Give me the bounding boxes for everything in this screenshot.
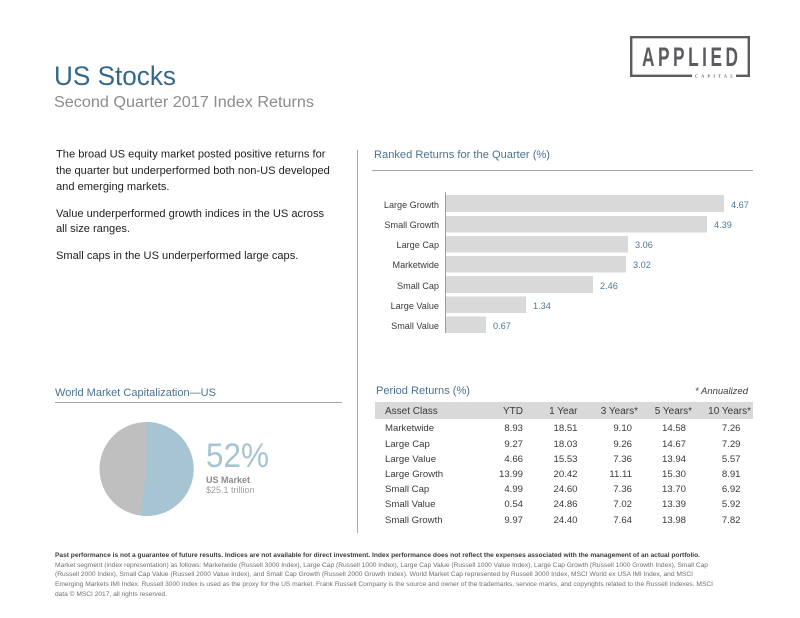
table: 20.42 <box>553 469 578 480</box>
table: 13.70 <box>662 484 686 495</box>
table: 9.97 <box>504 515 523 526</box>
table: 15.53 <box>553 454 578 465</box>
table: 18.51 <box>553 423 578 434</box>
table: 7.02 <box>613 499 632 510</box>
stat label <box>206 475 255 495</box>
table: 7.64 <box>613 515 633 526</box>
table: Marketwide <box>385 423 434 434</box>
table: Large Cap <box>385 439 430 450</box>
heading: world market cap: World Market Capitalization—US <box>55 387 216 399</box>
bar chart: 1.34 <box>533 301 551 311</box>
footnote: Past performance is not a guarantee of future results. Indices are not available for direct investment. Index performance does not reflect the expenses associated with the management of an actual portfolio. <box>55 552 700 559</box>
table: 5.57 <box>722 454 740 465</box>
footnote: Market segment (index representation) as follows: Marketwide (Russell 3000 Index), Large Cap (Russell 1000 Index), Large Cap Value (Russell 1000 Value Index), Large Cap Growth (Russell 1000 Growth Index), Small Cap <box>55 562 709 569</box>
bar chart: 0.67 <box>493 321 511 331</box>
panel: ranked returns <box>372 149 753 333</box>
table: 5.92 <box>722 499 740 510</box>
pie chart <box>100 422 194 516</box>
table: Small Growth <box>385 515 443 526</box>
note: annualized: * Annualized <box>695 386 749 397</box>
table: 24.40 <box>553 515 578 526</box>
table: 9.27 <box>504 439 523 450</box>
bar chart: Marketwide <box>392 260 439 270</box>
text block: market summary: and emerging markets. <box>56 181 169 193</box>
text block: market summary: Value underperformed growth indices in the US across <box>56 208 324 220</box>
table: 7.36 <box>613 484 632 495</box>
bar chart: Large Growth <box>384 200 439 210</box>
table: 14.58 <box>662 423 686 434</box>
table: 7.29 <box>722 439 740 450</box>
bar chart: 4.67 <box>731 200 749 210</box>
text block: market summary: Small caps in the US underperformed large caps. <box>56 250 298 262</box>
stat: 52%: 52% <box>206 437 269 475</box>
table: 9.26 <box>613 439 632 450</box>
text block: market summary: all size ranges. <box>56 223 130 235</box>
bar chart: 3.02 <box>633 260 651 270</box>
table: 7.82 <box>722 515 740 526</box>
bar chart: 4.39 <box>714 220 732 230</box>
table: 9.10 <box>613 423 632 434</box>
table: 8.93 <box>504 423 523 434</box>
table: Small Value <box>385 499 435 510</box>
table: 6.92 <box>722 484 740 495</box>
table: 4.99 <box>504 484 523 495</box>
table: 14.67 <box>662 439 686 450</box>
text block: market summary: The broad US equity market posted positive returns for <box>56 148 326 160</box>
table: 1 Year <box>549 406 578 417</box>
logo: Applied Capital: APPLIED <box>642 41 738 72</box>
table: 8.91 <box>722 469 740 480</box>
bar chart <box>384 192 749 333</box>
bar chart: Small Value <box>391 321 439 331</box>
footnote <box>55 552 713 598</box>
footnote: Emerging Markets IMI Index. Russell 3000 Index is used as the proxy for the US market. Frank Russell Company is the source and owner of the trademarks, service marks, and copyrights related to the Russell Indexes. MSCI <box>55 581 713 588</box>
table: YTD <box>503 406 523 417</box>
table: 5 Years* <box>655 406 692 417</box>
table: 0.54 <box>504 499 524 510</box>
table: 13.98 <box>662 515 686 526</box>
title: US Stocks <box>54 61 176 91</box>
text block: market summary: the quarter but underperformed both non-US developed <box>56 165 330 177</box>
bar chart: Small Growth <box>384 220 439 230</box>
logo: Applied Capital: CAPITAL <box>695 74 733 78</box>
table: 13.99 <box>499 469 523 480</box>
heading: ranked returns: Ranked Returns for the Quarter (%) <box>374 149 550 161</box>
table: Asset Class <box>385 406 438 417</box>
footnote: data © MSCI 2017, all rights reserved. <box>55 591 167 598</box>
table: Large Value <box>385 454 436 465</box>
heading: period returns: Period Returns (%) <box>376 385 470 397</box>
table: 11.11 <box>609 469 632 480</box>
table: 18.03 <box>553 439 578 450</box>
table: Small Cap <box>385 484 429 495</box>
stat label: $25.1 trillion <box>206 485 255 495</box>
table: 4.66 <box>504 454 523 465</box>
table: Large Growth <box>385 469 443 480</box>
table: 13.39 <box>662 499 686 510</box>
table: 13.94 <box>662 454 687 465</box>
table: 15.30 <box>662 469 686 480</box>
table: 7.26 <box>722 423 740 434</box>
table <box>375 402 753 526</box>
bar chart: Large Cap <box>397 240 439 250</box>
footnote: (Russell 2000 Index), Small Cap Value (Russell 2000 Value Index), and Small Cap Growth (Russell 2000 Growth Index). World Market Cap represented by Russell 3000 Index, MSCI World ex USA IMI Index, and MSCI <box>55 571 693 578</box>
table: 7.36 <box>613 454 632 465</box>
table: 24.86 <box>553 499 578 510</box>
table: 10 Years* <box>708 406 751 417</box>
subtitle: Second Quarter 2017 Index Returns <box>54 94 314 111</box>
bar chart: 2.46 <box>600 281 618 291</box>
table: 24.60 <box>553 484 578 495</box>
stat label: US Market <box>206 475 250 485</box>
table: 3 Years* <box>601 406 638 417</box>
bar chart: Large Value <box>391 301 439 311</box>
text block: market summary <box>56 148 330 262</box>
logo: Applied Capital <box>631 37 749 78</box>
vertical divider <box>357 150 358 533</box>
panel: world market capitalization <box>55 387 342 516</box>
panel: period returns <box>375 385 753 526</box>
bar chart: Small Cap <box>397 281 439 291</box>
bar chart: 3.06 <box>635 240 653 250</box>
